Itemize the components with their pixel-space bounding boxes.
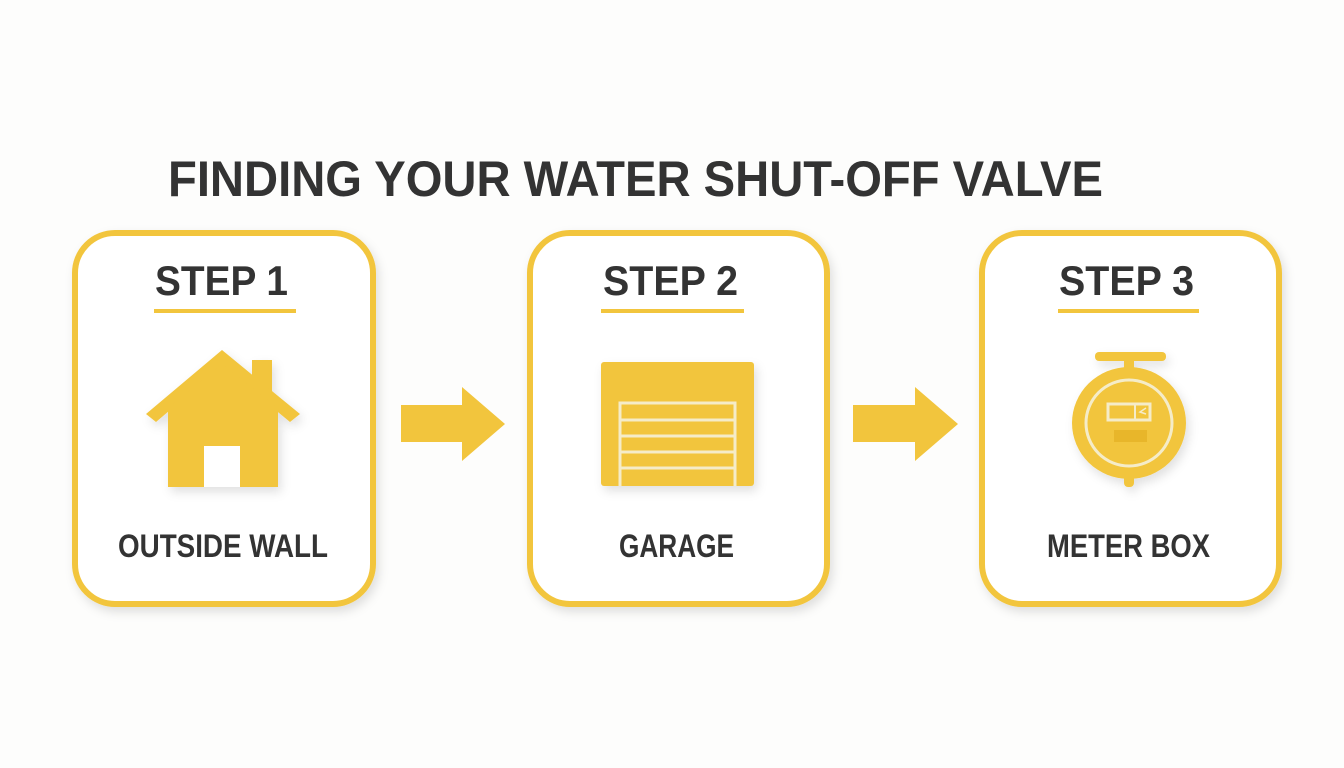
panel: step 2 xyxy=(530,233,827,604)
label: outside wall: OUTSIDE WALL xyxy=(118,528,328,564)
title: FINDING YOUR WATER SHUT-OFF VALVE xyxy=(168,151,1103,207)
panel: step 1 xyxy=(75,233,373,604)
arrow 1 xyxy=(401,387,505,461)
arrow 2 xyxy=(853,387,958,461)
label: meter box: METER BOX xyxy=(1047,528,1211,564)
heading: step 3: STEP 3 xyxy=(1059,257,1194,304)
icon: garage xyxy=(601,362,754,486)
heading: step 2: STEP 2 xyxy=(603,257,738,304)
panel: step 3 xyxy=(982,233,1279,604)
heading: step 1: STEP 1 xyxy=(155,257,288,304)
icon: meter xyxy=(1072,352,1186,487)
icon: house xyxy=(146,350,300,487)
label: garage: GARAGE xyxy=(619,528,734,564)
